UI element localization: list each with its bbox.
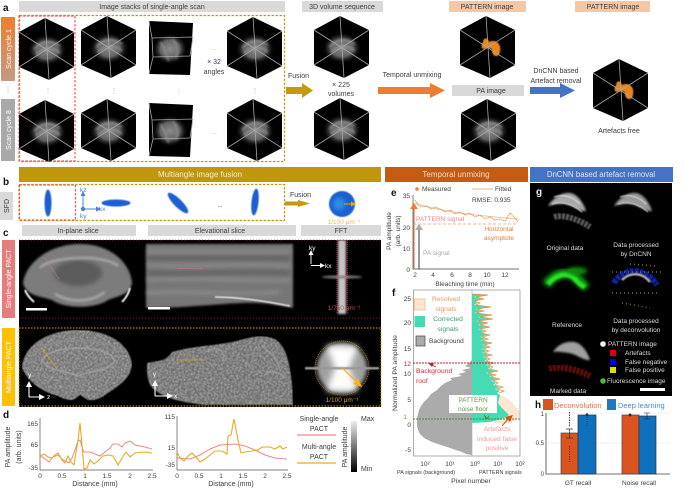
arrow: PA signal	[415, 224, 423, 269]
chart: left profile: 165	[27, 421, 38, 428]
text: fusion: Fusion	[288, 73, 309, 80]
legend: background	[416, 336, 464, 346]
vertical dots between rows: ⋮	[176, 89, 182, 96]
dotted line: multi-angle border	[19, 328, 381, 406]
multi-angle FFT: 1/100 μm⁻¹	[326, 397, 359, 404]
axes: 20	[403, 225, 410, 232]
panel: g image comparison	[530, 183, 672, 396]
axes	[536, 412, 670, 478]
panel letter h: h	[535, 400, 541, 411]
chart: left profile: 1	[83, 473, 87, 480]
frame: 12	[404, 361, 411, 368]
legend: image key: Artefacts	[625, 350, 651, 357]
bars: GT recall: GT recall	[565, 480, 592, 487]
panel letter f: f	[392, 288, 396, 299]
frame: 15	[404, 346, 411, 353]
heading: 3D volume sequence: 3D volume sequence	[309, 4, 375, 11]
axes: 2	[413, 272, 417, 279]
label: single-angle PACT: Single-angle PACT	[6, 249, 13, 309]
heading: in-plane slice: In-plane slice	[57, 228, 99, 235]
dotted line: single-angle border	[19, 240, 381, 318]
axes: Bleaching time (min)	[435, 281, 495, 288]
frame: 25	[404, 296, 411, 303]
axes	[403, 193, 519, 288]
legend: multi-angle PACT	[297, 444, 336, 463]
image: data processed by deconvolution	[612, 264, 662, 308]
text: temporal unmixing: Temporal unmixing	[383, 72, 441, 79]
frame: 0	[407, 422, 411, 429]
line: background roof	[413, 362, 520, 364]
label: scan cycle dots: ⋮	[5, 88, 11, 94]
header: multiangle image fusion	[19, 167, 381, 182]
legend: multi-angle PACT: PACT	[310, 454, 329, 461]
panel letter b: b	[3, 177, 9, 188]
PA image cube	[461, 99, 516, 161]
multi-angle elevational brain	[147, 336, 293, 405]
arrow: fusion	[285, 200, 310, 207]
heading: in-plane slice	[22, 225, 136, 236]
dashed box: all angles	[20, 16, 284, 162]
panel: h bar chart	[535, 399, 670, 487]
text: x 225 volumes	[328, 82, 355, 98]
text: PATTERN signal: PATTERN signal	[416, 216, 465, 223]
dashed box: angles	[19, 184, 284, 220]
text: x 32 angles: ...	[211, 45, 217, 52]
cube stack top row	[19, 16, 282, 80]
legend: corrected signals	[414, 316, 463, 333]
chart: left profile: 0.5	[57, 473, 67, 480]
frame: 1	[403, 414, 407, 421]
text: PA signal: PA signal	[423, 250, 450, 257]
colorbar: Max	[361, 416, 375, 423]
chart: right profile: 2	[263, 473, 267, 480]
vertical dots between rows: ⋮	[110, 88, 118, 95]
header: temporal unmixing	[385, 167, 528, 182]
multi-angle in-plane brain: z	[47, 394, 50, 401]
axes: 12	[501, 272, 509, 279]
text: original data: Original data	[547, 245, 584, 252]
x tick labels	[420, 460, 526, 468]
peach resolved artefact area	[495, 395, 520, 423]
axes: 0	[541, 472, 545, 478]
chart: right profile: 0.5	[194, 473, 204, 480]
text: x 225 volumes: volumes	[328, 91, 355, 98]
frame: 5	[407, 397, 411, 404]
text: data processed by DnCNN: Data processed	[613, 242, 659, 249]
text: artefact false positive: positive	[485, 445, 509, 452]
legend: measured / fitted / RMSE: Fitted	[495, 186, 512, 193]
black background	[530, 183, 672, 396]
axes: 10	[483, 272, 491, 279]
legend: measured / fitted / RMSE: Measured	[422, 186, 451, 193]
legend: corrected signals: Corrected	[433, 316, 463, 323]
colorbar: Min	[361, 466, 372, 473]
dashed box: single angle	[19, 16, 75, 161]
x captions	[397, 470, 522, 476]
panel letter d: d	[3, 410, 9, 421]
chart: right profile: 2.5	[282, 473, 292, 480]
x tick labels: 10²	[420, 461, 431, 468]
label: scan cycle 1: Scan cycle 1	[6, 29, 13, 69]
histogram: resolved signals	[472, 294, 504, 393]
dashed box: single angle	[20, 185, 76, 220]
x captions: PA signals (background)	[397, 470, 455, 476]
panel letter g: g	[536, 187, 542, 198]
axes: 35	[403, 193, 410, 200]
cube stack bottom row	[19, 99, 282, 162]
axis title	[386, 212, 402, 250]
arrow: fusion	[286, 83, 313, 98]
axes: 1	[541, 412, 545, 418]
text: data processed by deconvolution: Data processed	[613, 318, 659, 325]
chart: right profile: 1.5	[238, 473, 248, 480]
arrow: PATTERN signal	[410, 203, 418, 269]
chart: left profile: 65	[31, 442, 38, 449]
scale bar	[640, 388, 665, 391]
panel: b SFD	[0, 177, 361, 226]
chart: left profile: 2.5	[147, 473, 157, 480]
text: DnCNN based artefact removal: Artefact removal	[531, 78, 582, 85]
panel: d line profiles	[3, 410, 375, 488]
text: fusion: Fusion	[290, 192, 311, 199]
text: artefact false positive	[477, 426, 517, 452]
label: scan cycle 8: Scan cycle 8	[6, 110, 13, 150]
heading: 3D volume sequence	[302, 1, 383, 12]
panel: c image grid	[2, 225, 381, 407]
legend: image key: PATTERN image	[608, 341, 657, 348]
heading: image stacks: Image stacks of single-angle scan	[99, 4, 205, 11]
text: artefacts free: Artefacts free	[598, 128, 640, 135]
heading: PATTERN image 1	[449, 1, 526, 12]
text: background roof: Background	[416, 368, 452, 375]
x axis title: Pixel number	[451, 478, 492, 485]
fused SFD disc	[329, 191, 356, 217]
heading: image stacks	[19, 1, 285, 12]
text: x 32 angles	[204, 45, 225, 136]
heading: PATTERN image 2	[575, 1, 650, 12]
image: reference	[546, 267, 587, 288]
chart: right profile: Distance (mm)	[208, 481, 254, 488]
axis title: PA amplitude: (arb. units)	[16, 430, 23, 464]
header: DnCNN based artefact removal: DnCNN based artefact removal	[547, 170, 655, 179]
single-angle elevational slice	[146, 244, 293, 310]
chart: left profile: 2	[128, 473, 132, 480]
label: PA image	[452, 85, 524, 96]
label: single-angle PACT	[2, 240, 15, 318]
chart: right profile: 0	[175, 473, 179, 480]
text: reference: Reference	[552, 322, 582, 329]
panel: e bleaching chart	[386, 186, 519, 288]
text: marked data: Marked data	[550, 388, 586, 395]
chart: left profile: -35	[29, 465, 38, 472]
frame	[403, 290, 520, 456]
vertical dots between rows: ⋮	[252, 88, 258, 95]
panel letter a: a	[3, 3, 9, 14]
x tick labels: 10¹	[493, 461, 504, 468]
vertical dots between rows: ⋮	[44, 88, 52, 95]
legend: single-angle PACT: PACT	[310, 426, 329, 433]
text: background roof: roof	[416, 378, 428, 385]
k-space axes: kz	[80, 187, 86, 194]
axis title: PA amplitude	[5, 427, 23, 467]
legend: multi-angle PACT: Multi-angle	[302, 444, 336, 451]
x tick labels: 10⁰	[470, 460, 480, 468]
label: PATTERN noise floor: PATTERN	[458, 397, 488, 404]
label: scan cycle 1	[1, 17, 15, 81]
fitted curve	[415, 203, 518, 219]
artefact free cube	[593, 59, 648, 121]
legend: corrected signals: signals	[437, 326, 459, 333]
panel letter c: c	[3, 228, 9, 239]
label: PATTERN noise floor	[449, 395, 497, 413]
text: x 32 angles: angles	[204, 69, 225, 76]
SFD blobs	[44, 188, 260, 216]
x tick labels: 10²	[515, 461, 526, 468]
label: PATTERN noise floor: noise floor	[458, 406, 489, 413]
legend: background: Background	[429, 338, 464, 345]
axis title: (arb. units)	[395, 215, 402, 247]
text: 1/100: 1/100 μm⁻¹	[328, 219, 361, 226]
axes: 4	[431, 272, 435, 279]
text: data processed by deconvolution: by deconvolution	[612, 327, 661, 334]
axis title: PA amplitude	[386, 212, 393, 250]
text: data processed by deconvolution	[612, 318, 661, 334]
legend: image key: False positive	[625, 367, 665, 374]
single-angle FFT: 1/750 μm⁻¹	[328, 305, 361, 312]
arrow: temporal unmixing	[378, 83, 445, 98]
multi-angle elevational brain: y	[153, 371, 157, 378]
legend: deconvolution: Deconvolution	[554, 401, 602, 410]
colorbar	[342, 416, 375, 473]
axes: 0.5	[536, 441, 545, 447]
arrow: noise floor	[484, 414, 490, 419]
label: PA image: PA image	[476, 88, 506, 95]
legend: single-angle PACT	[297, 416, 339, 435]
image: original data	[548, 193, 590, 227]
label: SFD	[0, 192, 13, 220]
legend: image key: False negative	[625, 359, 668, 366]
heading: elevational slice	[148, 225, 296, 236]
header: multiangle image fusion: Multiangle image fusion	[158, 170, 242, 179]
text: x 225 volumes: × 225	[332, 82, 350, 89]
text: horizontal asymptote	[484, 226, 514, 242]
chart: left profile: 1.5	[102, 473, 112, 480]
single-angle FFT: kx	[325, 263, 332, 270]
histogram: background	[417, 360, 472, 455]
label: scan cycle 8	[1, 99, 15, 161]
text: data processed by DnCNN: by DnCNN	[620, 251, 652, 258]
frame: 10	[404, 371, 411, 378]
legend: measured / fitted / RMSE	[415, 186, 512, 204]
single-angle FFT: ky	[309, 245, 316, 252]
frame: -5	[405, 447, 411, 454]
header: DnCNN based artefact removal	[530, 167, 673, 182]
vertical dots between rows	[44, 88, 258, 96]
3D volume cube top	[314, 16, 369, 78]
multi-angle in-plane brain: y	[28, 372, 32, 379]
k-space axes: ky	[80, 213, 87, 220]
heading: PATTERN image 2: PATTERN image	[587, 4, 639, 11]
text: data processed by DnCNN	[613, 242, 659, 258]
legend: image key: Fluorescence image	[607, 378, 666, 385]
arrow: DnCNN	[530, 83, 575, 98]
chart: right profile: 115	[165, 414, 175, 421]
chart: left profile: Distance (mm)	[72, 481, 118, 488]
label: multiangle PACT: Multiangle PACT	[6, 340, 13, 393]
text: x 32 angles: × 32	[207, 59, 221, 66]
legend: resolved signals: Resolved	[432, 296, 460, 303]
label: SFD: SFD	[4, 199, 11, 213]
text: DnCNN based artefact removal: DnCNN based	[533, 68, 579, 75]
image: data processed by DnCNN	[614, 193, 652, 212]
panel letter e: e	[391, 188, 397, 199]
line: noise floor	[413, 418, 520, 420]
label: multiangle PACT	[2, 328, 15, 406]
single-angle FFT	[308, 240, 362, 314]
image: marked data	[549, 342, 590, 376]
PATTERN cube	[460, 16, 515, 78]
frame: 20	[404, 320, 411, 327]
heading: FFT	[301, 225, 381, 236]
axis title: Normalized PA amplitude	[392, 335, 399, 411]
legend: measured / fitted / RMSE: RMSE: 0.935	[472, 197, 511, 204]
multi-angle FFT	[305, 341, 379, 404]
axes: 0	[406, 267, 410, 274]
k-space axes: kx	[99, 206, 106, 213]
k-space axes	[80, 187, 106, 220]
axes: 10	[403, 246, 410, 253]
legend: resolved signals	[414, 296, 460, 313]
horizontal asymptote	[413, 223, 518, 225]
panel: f histogram	[392, 288, 526, 485]
multi-angle elevational brain: x	[174, 393, 178, 400]
x captions: PATTERN signals	[479, 470, 522, 476]
chart: right profile: 15	[168, 445, 175, 452]
legend: deep learning: Deep learning	[618, 401, 665, 410]
legend: image key	[600, 341, 668, 385]
histogram: corrected signals	[472, 294, 509, 423]
text: artefact false positive: Artefacts	[484, 426, 511, 433]
black image background	[19, 240, 381, 407]
header: temporal unmixing: Temporal unmixing	[422, 170, 490, 179]
chart: left profile: 0	[38, 473, 42, 480]
heading: FFT: FFT	[335, 228, 348, 235]
x tick labels: 10¹	[445, 461, 456, 468]
heading: elevational slice: Elevational slice	[195, 228, 245, 235]
multi-angle in-plane brain	[22, 330, 132, 401]
legend: resolved signals: signals	[435, 306, 457, 313]
axes: 8	[468, 272, 472, 279]
axes: 6	[450, 272, 454, 279]
arrow: artefact	[502, 415, 513, 426]
text: artefact false positive: induced false	[477, 436, 517, 443]
chart: right profile	[165, 414, 292, 488]
arrow: background roof	[428, 363, 436, 367]
ellipsis: ...	[217, 203, 223, 209]
axis title: PA amplitude: PA amplitude	[5, 427, 12, 467]
chart: left profile	[27, 418, 157, 488]
legend: single-angle PACT: Single-angle	[300, 416, 339, 423]
text: background roof	[416, 368, 452, 385]
panel: a pipeline overview	[1, 1, 650, 162]
chart: right profile: 1	[219, 473, 223, 480]
3D volume cube bottom	[314, 98, 369, 160]
text: x 32 angles: ...	[211, 129, 217, 136]
colorbar: PA amplitude	[342, 427, 349, 467]
chart: right profile: -35	[166, 462, 175, 469]
measured curve	[415, 200, 518, 222]
text: horizontal asymptote: asymptote	[484, 235, 514, 242]
bars: noise recall: Noise recall	[622, 480, 657, 487]
text: DnCNN based artefact removal	[531, 68, 582, 85]
text: horizontal asymptote: Horizontal	[484, 226, 514, 233]
heading: PATTERN image 1: PATTERN image	[461, 4, 513, 11]
single-angle in-plane brain	[23, 244, 132, 310]
